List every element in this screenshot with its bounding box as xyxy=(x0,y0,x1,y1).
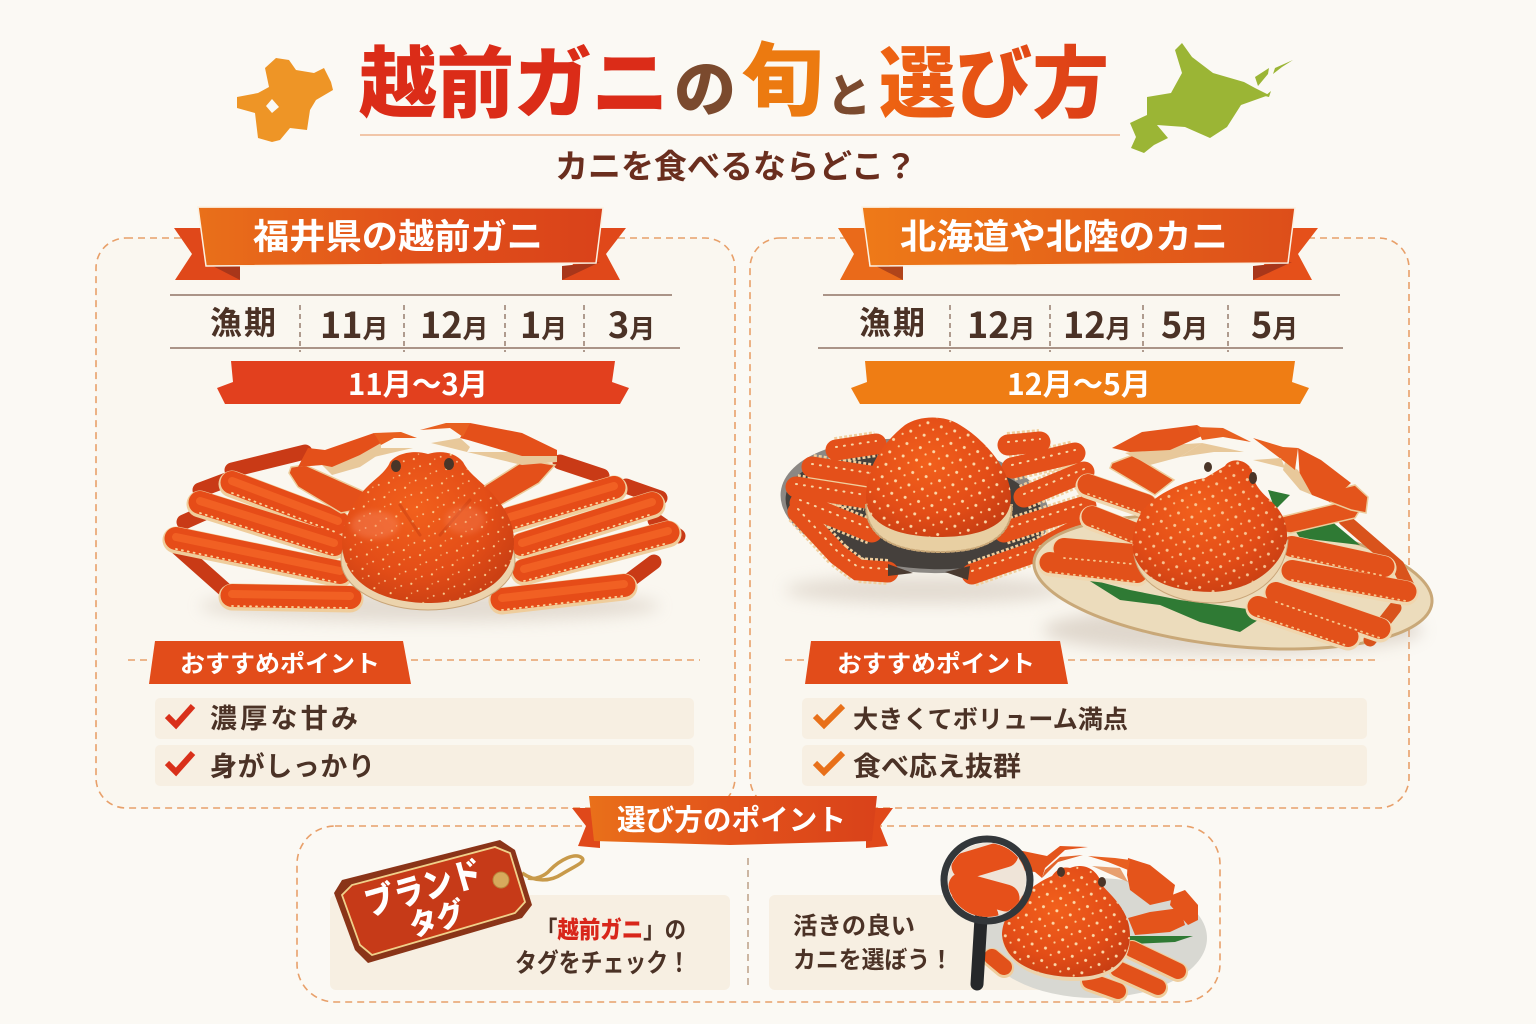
subtitle: カニを食べるならどこ？ xyxy=(555,140,917,188)
title: 越前ガニ xyxy=(359,22,669,134)
title: と xyxy=(827,60,871,126)
divider xyxy=(360,134,1120,136)
illustration: king crab on dark plate xyxy=(774,418,1086,604)
list item: big and satisfying xyxy=(802,698,1367,739)
banner: season 12月〜5月: 12月～5月 xyxy=(1007,360,1151,404)
icon: Fukui prefecture map xyxy=(237,58,333,142)
list item: rich sweetness xyxy=(155,697,694,739)
card: choose a lively crab xyxy=(769,839,1207,998)
illustration: snow crab on leaf platter xyxy=(1027,425,1439,667)
table: fishing season months: 11月 xyxy=(320,297,388,349)
table: fishing season months: 5月 xyxy=(1161,297,1208,349)
panel: Hokkaido and Hokuriku crab xyxy=(750,207,1439,808)
title: 選び方 xyxy=(879,22,1109,134)
ribbon: Hokkaido heading: 北海道や北陸のカニ xyxy=(900,209,1228,260)
table: fishing season months: 12月 xyxy=(1063,297,1132,349)
text: choose a lively crab: 活きの良い xyxy=(793,906,915,941)
icon: brand tag: ブランド xyxy=(358,845,487,926)
text: check the tag xyxy=(515,910,690,980)
recommendation heading xyxy=(785,641,1375,684)
list item: firm flesh: 身がしっかり xyxy=(210,745,375,784)
list item: rich sweetness: 濃厚な甘み xyxy=(210,697,358,736)
title xyxy=(359,17,1109,134)
recommendation heading xyxy=(128,641,700,684)
banner: season 12月〜5月 xyxy=(851,360,1309,404)
ribbon: Fukui heading xyxy=(174,207,626,280)
panel: Fukui Echizen crab xyxy=(96,207,735,808)
table: fishing season months: 12月 xyxy=(967,297,1036,349)
panel: how to choose xyxy=(297,796,1220,1002)
table: fishing season months xyxy=(818,295,1343,352)
list item: very filling: 食べ応え抜群 xyxy=(853,745,1021,784)
icon: brand tag xyxy=(334,840,583,963)
text: check the tag: 「越前ガニ」の xyxy=(536,910,686,945)
illustration: crab on plate xyxy=(983,846,1207,998)
icon: brand tag: タグ xyxy=(403,888,469,946)
recommendation heading: おすすめポイント xyxy=(180,644,380,679)
banner: season 11月〜3月: 11月～3月 xyxy=(348,360,488,404)
list item: firm flesh xyxy=(155,745,694,786)
table: fishing season months: 漁期 xyxy=(859,298,925,344)
title: 旬 xyxy=(741,17,823,133)
ribbon: Hokkaido heading xyxy=(838,207,1318,280)
illustration: snow crab xyxy=(176,423,678,622)
icon: Hokkaido map xyxy=(1130,43,1293,153)
ribbon: how to choose heading: 選び方のポイント xyxy=(617,797,846,839)
table: fishing season months: 漁期 xyxy=(210,298,276,344)
table: fishing season months: 12月 xyxy=(420,297,488,349)
recommendation heading: おすすめポイント xyxy=(837,644,1035,679)
text: choose a lively crab: カニを選ぼう！ xyxy=(793,940,953,975)
table: fishing season months xyxy=(170,295,680,352)
table: fishing season months: 5月 xyxy=(1251,297,1298,349)
list item: big and satisfying: 大きくてボリューム満点 xyxy=(853,700,1128,736)
ribbon: how to choose heading xyxy=(572,796,893,848)
icon: magnifying glass xyxy=(944,839,1030,984)
text: choose a lively crab xyxy=(793,906,953,975)
ribbon: Fukui heading: 福井県の越前ガニ xyxy=(253,209,543,260)
card: check the tag xyxy=(330,840,730,990)
table: fishing season months: 3月 xyxy=(608,297,655,349)
banner: season 11月〜3月 xyxy=(217,360,629,404)
table: fishing season months: 1月 xyxy=(520,297,567,349)
list item: very filling xyxy=(802,745,1367,786)
text: check the tag: タグをチェック！ xyxy=(515,943,690,980)
title: の xyxy=(674,39,736,129)
